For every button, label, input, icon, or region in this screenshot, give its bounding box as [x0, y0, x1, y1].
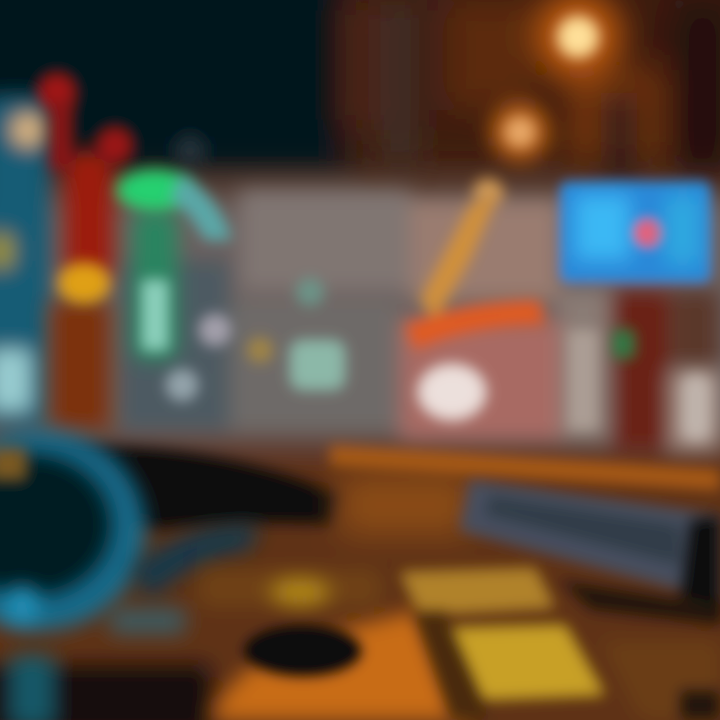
- dashboard panel: right display: [460, 480, 720, 625]
- billboard: blue screen: [560, 182, 710, 282]
- storefront details: [166, 190, 710, 440]
- dashboard: dark wave: [40, 445, 720, 535]
- middle street haze and storefronts: [120, 190, 720, 450]
- green and teal sign: [117, 136, 232, 360]
- left tower: teal: [0, 95, 50, 425]
- red and yellow traffic sign: [38, 73, 133, 430]
- console: bright orange and yellow: [210, 568, 720, 720]
- street lights: [473, 0, 622, 209]
- steering wheel: blue ring: [0, 430, 260, 630]
- building glow: upper right: [340, 0, 720, 180]
- lower dashboard: bottom left: [0, 570, 380, 720]
